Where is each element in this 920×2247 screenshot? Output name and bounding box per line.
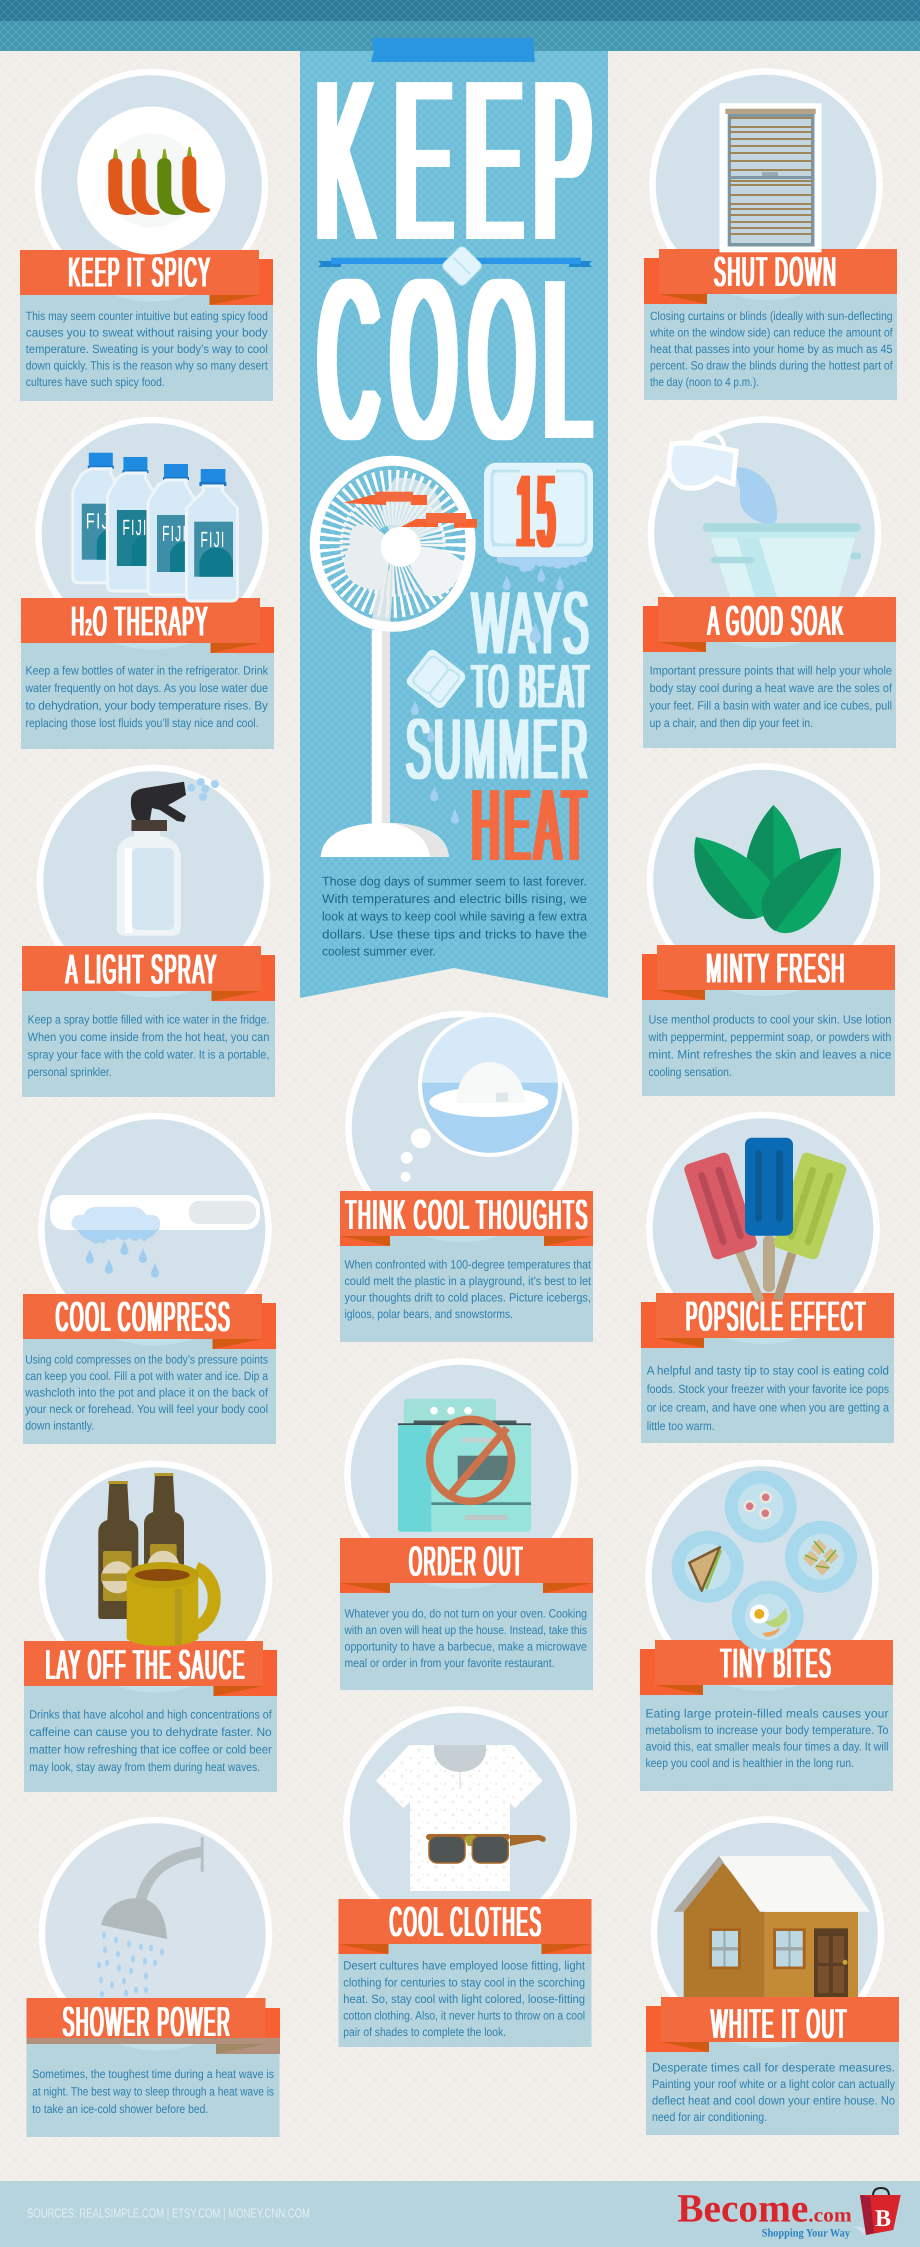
body text: Drinks that have alcohol and high concentrations of <box>29 1707 272 1721</box>
body text: or ice cream, and have one when you are getting a <box>647 1400 889 1414</box>
body text <box>344 1257 592 1321</box>
fan <box>315 461 471 857</box>
intro paragraph: look at ways to keep cool while saving a few extra <box>322 910 587 924</box>
text box <box>338 1944 592 2047</box>
ribbon <box>340 1538 593 1593</box>
body text: Painting your roof white or a light color can actually <box>652 2077 895 2091</box>
text box <box>340 1583 593 1690</box>
body text: spray your face with the cold water. It is a portable, <box>28 1048 269 1062</box>
body text: Use menthol products to cool your skin. Use lotion <box>648 1013 891 1027</box>
panel: minty fresh <box>642 766 895 1096</box>
body text: Keep a spray bottle filled with ice water in the fridge. <box>28 1013 269 1027</box>
illustration circle <box>348 1014 576 1241</box>
body text: your thoughts drift to cold places. Picture icebergs, <box>344 1290 591 1304</box>
text box <box>643 642 896 748</box>
panel: cool clothes <box>338 1710 592 2047</box>
body text: need for air conditioning. <box>652 2110 767 2124</box>
icon: chillies on plate <box>77 106 225 254</box>
body text <box>26 309 268 389</box>
become.com logo <box>677 2186 901 2240</box>
body text: heat that passes into your home by as much as 45 <box>650 342 893 356</box>
body text: Desperate times call for desperate measures. <box>652 2061 895 2075</box>
panel: think cool thoughts <box>340 1014 593 1342</box>
illustration circle <box>651 420 878 646</box>
text: TO BEAT <box>472 652 591 721</box>
ribbon <box>340 1191 593 1246</box>
body text: your neck or forehead. You will feel your body cool <box>25 1402 268 1416</box>
sources: SOURCES: REALSIMPLE.COM | ETSY.COM | MONEY.CNN.COM <box>27 2206 310 2221</box>
body text: to dehydration, your body temperature rises. By <box>26 698 268 712</box>
body text: Sometimes, the toughest time during a heat wave is <box>32 2067 274 2081</box>
become.com logo: .com <box>808 2205 852 2227</box>
body text: clothing for centuries to stay cool in the scorching <box>343 1975 585 1989</box>
ribbon <box>640 1640 893 1695</box>
body text: This may seem counter intuitive but eating spicy food <box>26 309 268 323</box>
body text: cooling sensation. <box>648 1065 732 1079</box>
text box <box>21 643 274 749</box>
body text: up a chair, and then dip your feet in. <box>650 716 813 730</box>
panel: a light spray: A LIGHT SPRAY <box>66 945 218 992</box>
text box <box>641 1338 894 1443</box>
text box <box>22 991 275 1097</box>
body text: cotton clothing. Also, it never hurts to throw on a cool <box>343 2008 585 2022</box>
footer <box>0 2181 920 2247</box>
icon: thought bubble with igloo <box>400 1015 560 1182</box>
panel: white it out <box>646 1820 899 2135</box>
body text: Eating large protein-filled meals causes your <box>646 1707 888 1721</box>
intro paragraph: Those dog days of summer seem to last forever. <box>322 874 587 888</box>
become.com logo: Shopping Your Way <box>762 2228 850 2240</box>
panel: a light spray <box>22 768 275 1097</box>
body text: foods. Stock your freezer with your favorite ice pops <box>647 1382 889 1396</box>
panel: keep it spicy <box>20 72 273 401</box>
body text: body stay cool during a heat wave are the soles of <box>650 681 893 695</box>
become.com logo: B <box>875 2206 891 2232</box>
body text: matter how refreshing that ice coffee or cold beer <box>29 1742 272 1756</box>
text: WAYS <box>472 572 591 672</box>
text: HEAT <box>472 768 591 882</box>
body text <box>647 1363 889 1433</box>
icon: water bottles: FIJI <box>200 527 225 552</box>
illustration circle <box>650 766 877 994</box>
ribbon <box>641 1293 894 1348</box>
body text: avoid this, eat smaller meals four times a day. It will <box>646 1740 888 1754</box>
ice cube on divider <box>441 245 483 287</box>
text box <box>26 2044 280 2137</box>
illustration circle <box>650 1115 876 1342</box>
icon: popsicles <box>683 1138 848 1301</box>
body text <box>32 2067 274 2116</box>
body text: When confronted with 100-degree temperatures that <box>344 1257 592 1271</box>
icon: crossed-out oven <box>398 1399 531 1532</box>
body text: the day (noon to 4 p.m.). <box>650 375 759 389</box>
panel: shower power: SHOWER POWER <box>63 1998 231 2045</box>
icon: white t-shirt and sunglasses <box>376 1745 546 1891</box>
illustration circle <box>654 1820 881 2046</box>
icon: beer bottles and coffee mug <box>98 1473 214 1646</box>
body text: cultures have such spicy food. <box>26 375 165 389</box>
icon: water bottles: FIJI <box>122 515 147 540</box>
illustration circle <box>42 1464 269 1691</box>
heading: ways to beat summer <box>406 572 591 797</box>
text box <box>20 295 273 401</box>
text box <box>644 294 897 400</box>
illustration circle <box>42 1820 269 2047</box>
panel: keep it spicy: KEEP IT SPICY <box>68 249 212 296</box>
become.com logo: Become <box>677 2186 808 2231</box>
ribbon pieces on fan <box>343 492 477 528</box>
text box <box>640 1685 893 1791</box>
body text: Using cold compresses on the body’s pressure points <box>25 1352 268 1366</box>
body text: down instantly. <box>25 1418 94 1432</box>
panel: order out: ORDER OUT <box>409 1538 524 1585</box>
body text: your feet. Fill a basin with water and ice cubes, pull <box>650 698 892 712</box>
body text: Desert cultures have employed loose fitting, light <box>343 1959 586 1973</box>
intro paragraph: dollars. Use these tips and tricks to have the <box>322 927 587 941</box>
body text: mint. Mint refreshes the skin and leaves a nice <box>648 1048 892 1062</box>
body text: temperature. Sweating is your body’s way to cool <box>26 342 268 356</box>
icon: small meal plates <box>672 1471 857 1653</box>
intro paragraph: With temperatures and electric bills rising, we <box>322 892 587 906</box>
body text: down quickly. This is the reason why so many desert <box>26 358 268 372</box>
body text: Keep a few bottles of water in the refrigerator. Drink <box>26 664 269 678</box>
icon: water basin and pitcher <box>669 432 861 597</box>
body text: at night. The best way to sleep through a heat wave is <box>32 2084 274 2098</box>
illustration circle <box>348 1362 574 1588</box>
text: SUMMER <box>406 701 591 797</box>
text box <box>646 2042 899 2135</box>
panel: h2o therapy: H2O THERAPY <box>71 598 209 645</box>
body text: deflect heat and cool down your entire house. No <box>652 2094 895 2108</box>
ribbon <box>642 945 895 1000</box>
body text: Closing curtains or blinds (ideally with sun-deflecting <box>650 309 893 323</box>
ribbon <box>23 1294 276 1349</box>
body text: opportunity to have a barbecue, make a microwave <box>344 1639 587 1653</box>
panel: cool compress <box>23 1116 276 1444</box>
body text: Important pressure points that will help your whole <box>650 664 892 678</box>
body text: little too warm. <box>647 1419 715 1433</box>
panel: h2o therapy <box>21 420 274 749</box>
center banner <box>300 34 608 998</box>
panel: tiny bites <box>640 1463 893 1791</box>
body text <box>646 1707 889 1770</box>
icon: water bottles <box>73 453 237 601</box>
ribbon <box>21 598 274 653</box>
body text: could melt the plastic in a playground, it’s best to let <box>344 1274 592 1288</box>
body text: personal sprinkler. <box>28 1065 112 1079</box>
body text: white on the window side) can reduce the amount of <box>649 326 893 340</box>
body text: may look, stay away from them during heat waves. <box>29 1760 260 1774</box>
body text: A helpful and tasty tip to stay cool is eating cold <box>647 1363 889 1377</box>
ribbon <box>22 946 275 1001</box>
illustration circle <box>346 1710 574 1936</box>
body text: washcloth into the pot and place it on the back of <box>24 1385 269 1399</box>
body text: to take an ice-cold shower before bed. <box>32 2102 208 2116</box>
ice block with 15: 15 <box>517 454 559 569</box>
illustration circle <box>652 72 880 298</box>
body text <box>25 664 269 730</box>
title: cool: COOL <box>319 233 590 487</box>
body text: meal or order in from your favorite restaurant. <box>344 1656 554 1670</box>
intro paragraph <box>322 874 587 959</box>
panel: lay off the sauce <box>24 1464 277 1792</box>
icon: water bottles: FIJI <box>162 521 187 546</box>
ribbon <box>646 1997 899 2052</box>
body text: pair of shades to complete the look. <box>343 2025 506 2039</box>
icon: cold compress cloth <box>50 1195 260 1278</box>
panel: shut down <box>644 72 897 400</box>
illustration circle <box>38 420 266 647</box>
panel: order out <box>340 1362 593 1690</box>
icon: window blinds <box>720 103 822 252</box>
body text <box>648 1013 892 1079</box>
body text <box>29 1707 272 1774</box>
illustration circle <box>38 72 265 299</box>
body text: metabolism to increase your body temperature. To <box>646 1723 889 1737</box>
body text <box>24 1352 269 1432</box>
illustration circle <box>648 1463 876 1690</box>
illustration circle <box>42 1116 268 1343</box>
body text <box>344 1606 587 1670</box>
falling ice cube <box>404 648 468 710</box>
blue tape <box>371 38 535 62</box>
ice block with 15 <box>484 454 593 572</box>
ribbon <box>644 249 897 304</box>
body text: igloos, polar bears, and snowstorms. <box>344 1307 513 1321</box>
panel: cool compress: COOL COMPRESS <box>56 1293 231 1340</box>
body text: caffeine can cause you to dehydrate faster. No <box>29 1725 272 1739</box>
panel: shower power <box>26 1820 280 2137</box>
text box <box>340 1236 593 1342</box>
ribbon <box>26 1998 280 2054</box>
body text: water frequently on hot days. As you lose water due <box>25 681 268 695</box>
intro paragraph: coolest summer ever. <box>322 945 436 959</box>
body text: heat. So, stay cool with light colored, loose-fitting <box>343 1992 585 2006</box>
text: THINK COOL THOUGHTS <box>346 1191 589 1238</box>
title: keep: KEEP <box>316 34 591 288</box>
panel: popsicle effect <box>641 1115 894 1443</box>
divider ribbon <box>318 258 592 267</box>
text: LAY OFF THE SAUCE <box>46 1641 246 1688</box>
body text: keep you cool and is healthier in the long run. <box>646 1756 854 1770</box>
body text: When you come inside from the hot heat, you can <box>28 1030 269 1044</box>
ribbon <box>20 250 273 305</box>
icon: water bottles: FIJI <box>86 509 116 534</box>
body text <box>652 2061 895 2124</box>
ribbon <box>643 597 896 652</box>
body text: can keep you cool. Fill a pot with water and ice. Dip a <box>25 1369 268 1383</box>
water drops <box>411 567 564 824</box>
icon: mint leaves <box>694 805 841 933</box>
panel: a good soak <box>643 420 896 748</box>
body text <box>28 1013 269 1079</box>
text box <box>24 1686 277 1792</box>
top band <box>0 0 920 51</box>
body text: replacing those lost fluids you’ll stay nice and cool. <box>26 716 258 730</box>
body text <box>343 1959 586 2039</box>
body text <box>650 664 893 730</box>
body text: Whatever you do, do not turn on your oven. Cooking <box>344 1606 587 1620</box>
ribbon <box>24 1641 277 1696</box>
body text <box>649 309 893 389</box>
panel: cool clothes: COOL CLOTHES <box>390 1898 542 1945</box>
text box <box>642 990 895 1096</box>
icon: house with white roof <box>674 1856 870 1997</box>
body text: with peppermint, peppermint soap, or powders with <box>648 1030 891 1044</box>
ribbon <box>338 1899 592 1954</box>
illustration circle <box>40 768 267 995</box>
body text: with an oven will heat up the house. Instead, take this <box>344 1623 587 1637</box>
icon: spray bottle <box>117 778 219 936</box>
icon: shower head <box>97 1837 204 1998</box>
text box <box>23 1339 276 1444</box>
body text: causes you to sweat without raising your body <box>26 326 268 340</box>
